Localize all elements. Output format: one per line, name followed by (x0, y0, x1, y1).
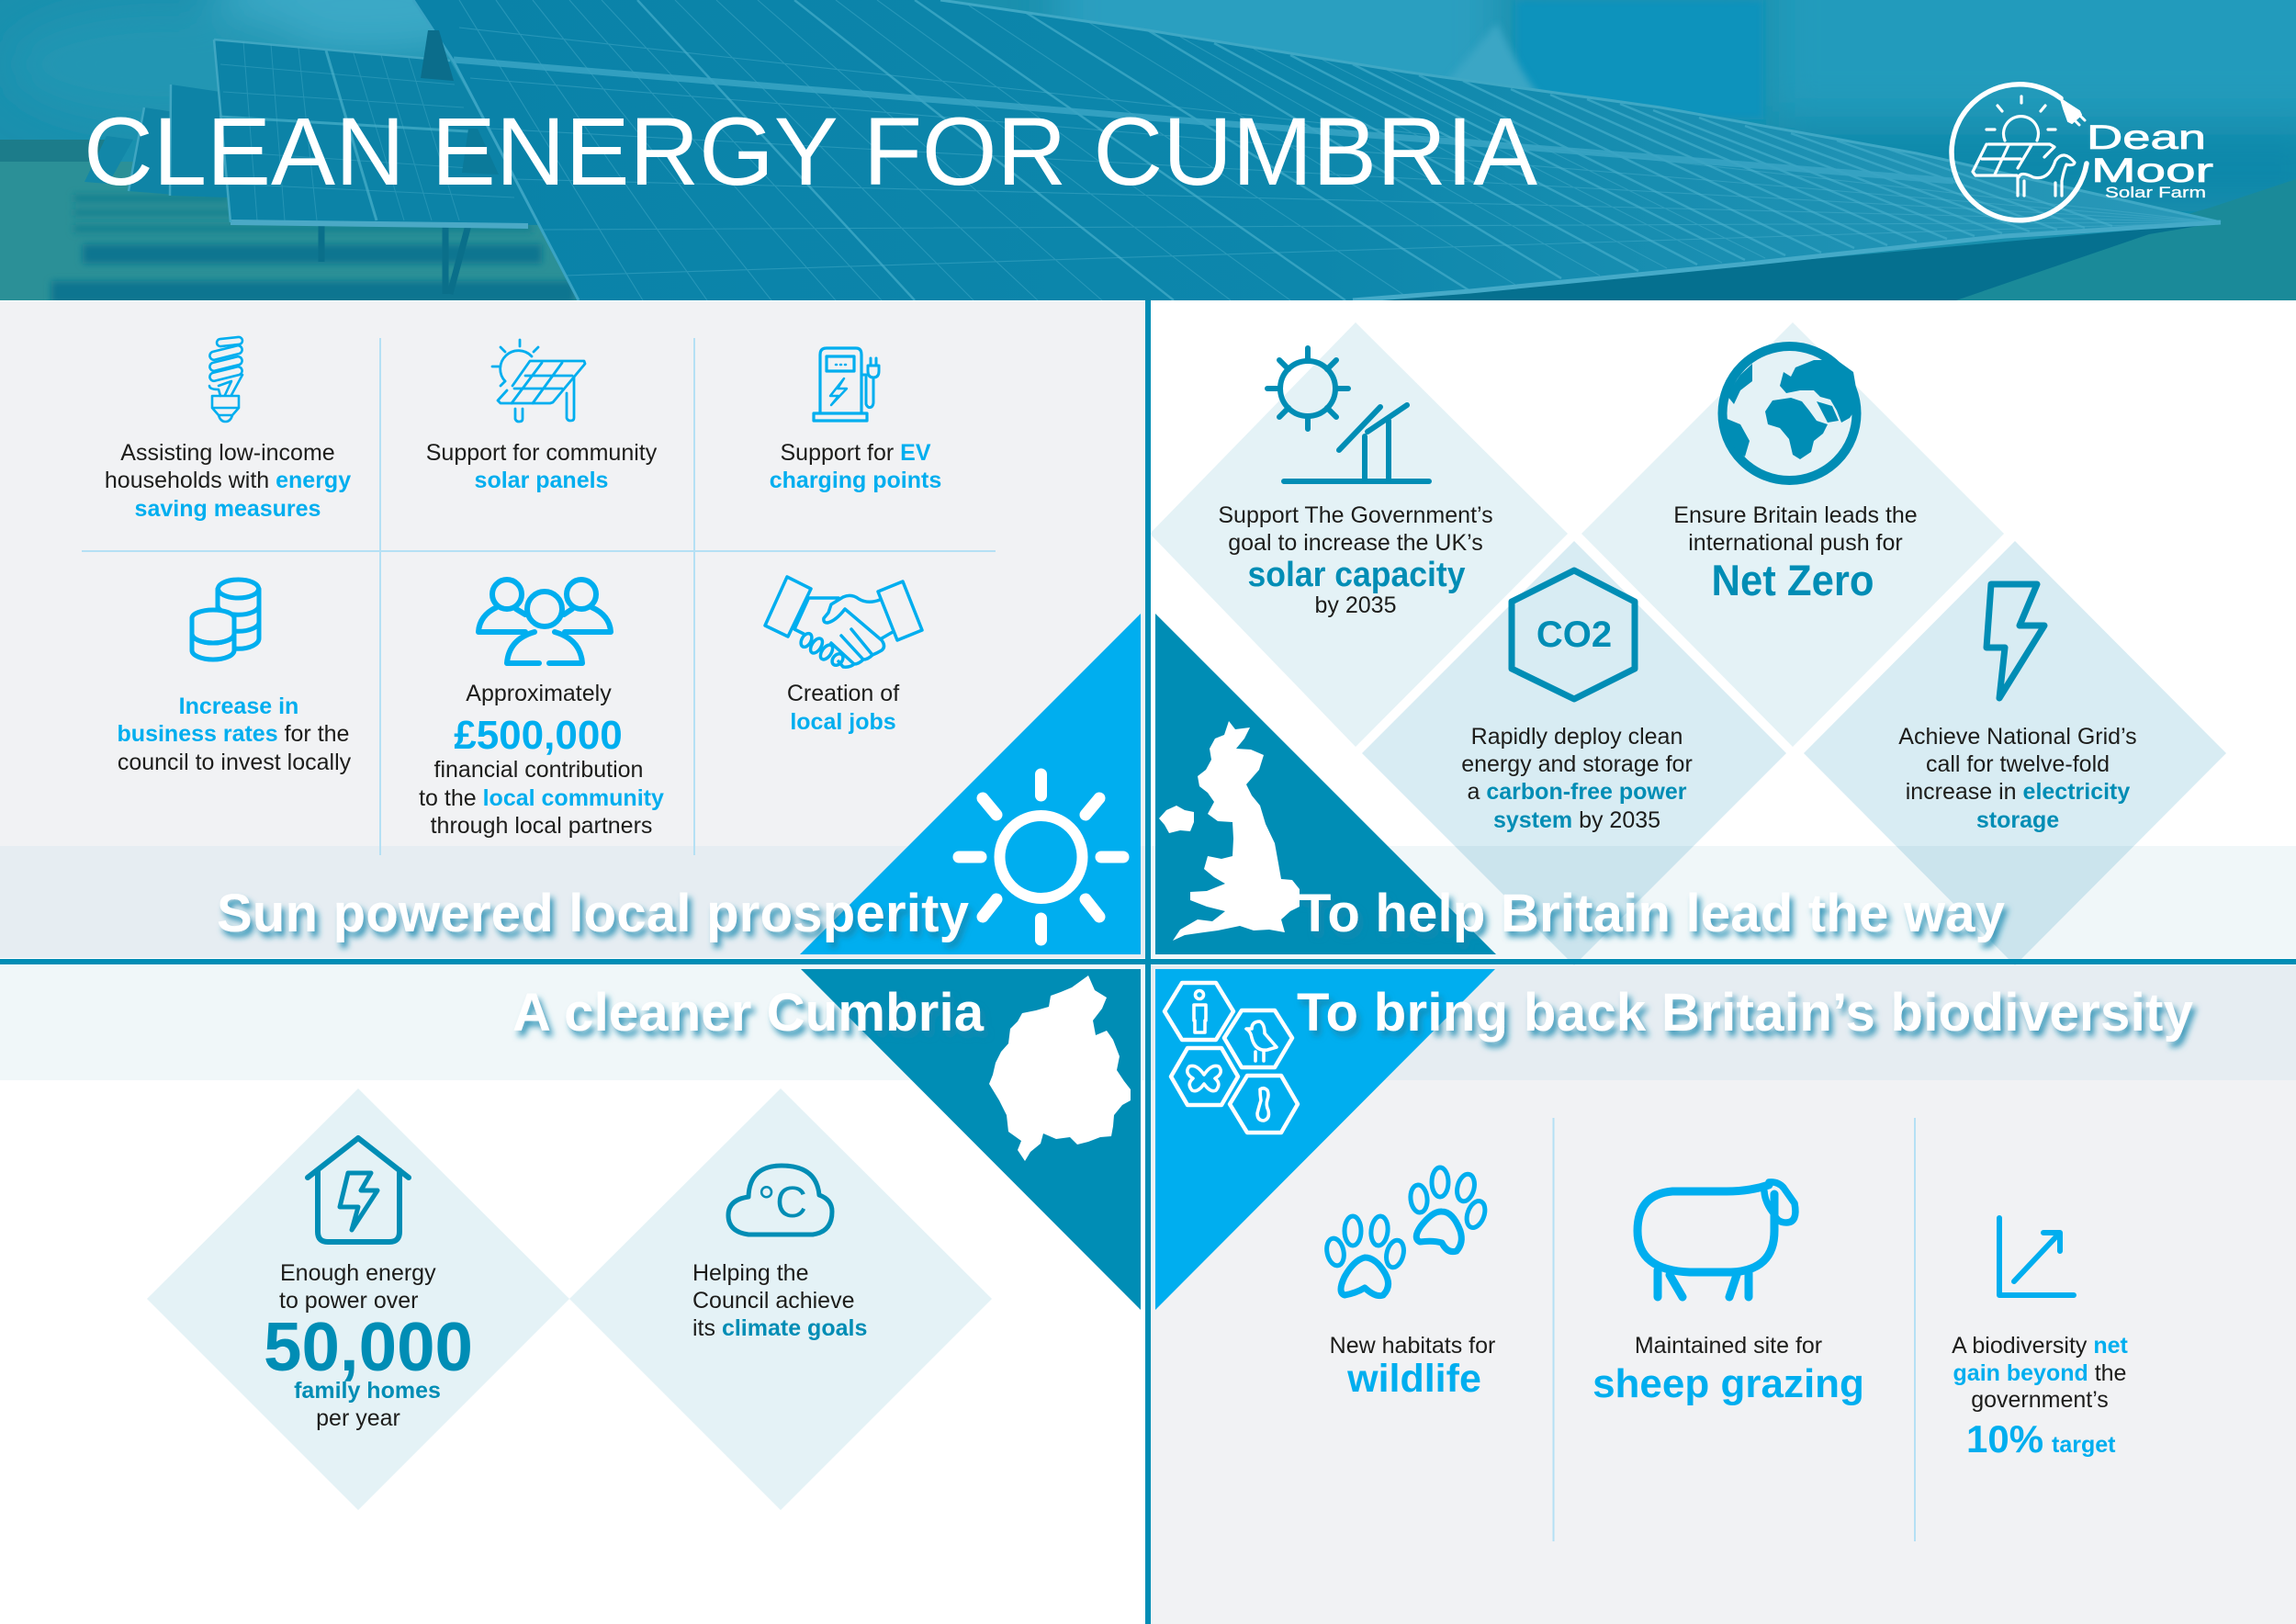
text: climate goals: its climate goals (692, 1315, 867, 1341)
panel: sun powered local prosperity background (0, 301, 1145, 958)
text: carbon-free power: energy and storage for (1461, 751, 1693, 777)
text: family homes (264, 1260, 473, 1431)
icon: community solar panel (492, 340, 585, 422)
text: solar capacity: solar capacity (1247, 556, 1466, 594)
text: electricity storage: Achieve National Grid’s (1898, 724, 2137, 750)
text: biodiversity net gain: government’s (1971, 1387, 2109, 1413)
diamond: carbon-free power (1362, 541, 1786, 965)
heading: to help Britain lead the way: To help Britain lead the way (1299, 884, 2005, 943)
text: community contribution (419, 681, 664, 839)
text: family homes: family homes (294, 1378, 441, 1404)
icon: sun white (959, 774, 1123, 940)
section: prosperity items (105, 337, 941, 839)
text: local jobs: local jobs (790, 709, 896, 735)
heading: sun powered local prosperity: Sun powered local prosperity (217, 884, 969, 943)
grid lines prosperity (82, 338, 996, 855)
text: solar capacity: by 2035 (1315, 592, 1396, 618)
icon: UK map (1159, 721, 1300, 941)
text: wildlife: New habitats for (1330, 1333, 1495, 1359)
text: net zero: Ensure Britain leads the (1673, 502, 1918, 528)
grid lines biodiversity (1554, 1118, 1915, 1541)
icon: sun and solar array (1267, 348, 1429, 481)
text: local jobs: Creation of (787, 681, 899, 706)
triangle: biodiversity (1155, 969, 1495, 1310)
diamond: electricity storage (1804, 541, 2226, 965)
text: electricity storage: storage (1976, 807, 2059, 833)
band: cleaner cumbria strip (0, 965, 1145, 1080)
icon: CO2 hexagon (1512, 570, 1635, 699)
section: Cumbria items (264, 1138, 867, 1431)
logo: Dean Moor Solar Farm (1952, 85, 2213, 220)
icon: species hexagons (1165, 983, 1298, 1133)
icon: coins (192, 580, 259, 660)
diamond: net zero (1581, 322, 2004, 747)
main solar panel (413, 0, 2221, 300)
text: climate goals: Helping the (692, 1260, 808, 1286)
text: wildlife: wildlife (1346, 1357, 1481, 1401)
text: community solar: solar panels (475, 468, 608, 493)
text: family homes: to power over (279, 1288, 418, 1314)
text: energy saving: Assisting low-income (120, 440, 335, 466)
text: carbon-free power: a carbon-free power (1468, 779, 1686, 805)
text: family homes: per year (316, 1405, 400, 1431)
frame mounts (421, 30, 454, 81)
diamond: solar capacity (1150, 322, 1568, 747)
icon: cloud with temperature: °C (758, 1179, 807, 1227)
text: wildlife (1330, 1333, 1495, 1401)
icon: globe (1723, 346, 1859, 480)
text: net zero (1673, 502, 1918, 604)
panel: biodiversity background (1151, 965, 2296, 1624)
triangle: Cumbria (801, 969, 1141, 1310)
text: electricity storage: call for twelve-fold (1926, 751, 2110, 777)
text: biodiversity net gain: gain beyond the (1953, 1360, 2126, 1386)
text: solar capacity: goal to increase the UK’s (1228, 530, 1483, 556)
text: biodiversity net gain: A biodiversity net (1952, 1333, 2128, 1359)
text: sheep grazing: sheep grazing (1593, 1361, 1864, 1406)
text: energy saving: saving measures (135, 496, 321, 522)
text: electricity storage: increase in electricity (1906, 779, 2130, 805)
text: family homes: Enough energy (280, 1260, 436, 1286)
text: net zero: international push for (1688, 530, 1903, 556)
text: energy saving: households with energy (105, 468, 351, 493)
text: EV charging: Support for EV (781, 440, 931, 466)
text: community contribution: Approximately (466, 681, 612, 706)
text: sheep grazing: Maintained site for (1635, 1333, 1822, 1359)
text: solar capacity: Support The Government’s (1218, 502, 1493, 528)
text: carbon-free power: system by 2035 (1493, 807, 1660, 833)
title: CLEAN ENERGY FOR CUMBRIA (84, 98, 1537, 206)
field left (0, 140, 588, 304)
icon: handshake (765, 577, 922, 668)
logo: Dean Moor Solar Farm: Dean (2087, 118, 2206, 156)
band: britain heading strip (1151, 846, 2296, 958)
text: biodiversity net gain (1952, 1333, 2129, 1460)
text: sheep grazing (1593, 1333, 1864, 1406)
text: family homes: 50,000 (264, 1308, 473, 1385)
diamond: family homes (147, 1088, 569, 1510)
text: business rates: Increase in (179, 694, 298, 719)
text: business rates: business rates for the (118, 721, 349, 747)
heading: a cleaner Cumbria: A cleaner Cumbria (512, 983, 985, 1043)
icon: paw prints (1324, 1167, 1489, 1296)
text: community contribution: to the local community (419, 785, 664, 811)
logo: Dean Moor Solar Farm: Moor (2091, 152, 2213, 189)
section: biodiversity items (1324, 1167, 2129, 1460)
triangle: sun (800, 614, 1141, 954)
far panels (84, 136, 133, 184)
icon: lightning bolt (1986, 584, 2044, 698)
divider horizontal (0, 959, 2296, 964)
icon: house with bolt (308, 1138, 409, 1242)
icon: cloud with temperature (728, 1166, 832, 1235)
panel underside shadow (1384, 226, 2197, 300)
icon: people (478, 580, 611, 663)
text: biodiversity net gain: target (2052, 1432, 2116, 1458)
icon: CO2 hexagon: CO2 (1536, 615, 1612, 655)
triangle: UK (1155, 614, 1496, 954)
text: net zero: Net Zero (1712, 556, 1874, 604)
icon: growth chart arrow (1999, 1218, 2074, 1295)
text: business rates: council to invest locally (118, 750, 352, 775)
header banner: solar panel photo (0, 0, 2296, 304)
text: community solar: Support for community (426, 440, 658, 466)
section: Britain items (1218, 346, 2137, 833)
field right (1956, 179, 2296, 300)
icon: EV charger (814, 348, 879, 421)
icon: Cumbria map (989, 976, 1131, 1161)
diamond: climate goals (569, 1088, 992, 1510)
text: carbon-free power: Rapidly deploy clean (1471, 724, 1683, 750)
text: community contribution: financial contribution (434, 757, 643, 783)
text: EV charging: charging points (770, 468, 941, 493)
text: community contribution: through local partners (431, 813, 652, 839)
icon: low energy bulb (208, 337, 243, 422)
text: solar capacity (1218, 502, 1493, 618)
heading: to bring back Britain's biodiversity: To bring back Britain’s biodiversity (1297, 983, 2193, 1043)
divider vertical (1145, 300, 1151, 1624)
text: biodiversity net gain: 10% (1966, 1417, 2043, 1460)
text: community contribution: £500,000 (454, 713, 623, 758)
icon: sheep (1638, 1182, 1795, 1297)
text: climate goals: Council achieve (692, 1288, 854, 1314)
logo: Dean Moor Solar Farm: Solar Farm (2105, 184, 2206, 201)
